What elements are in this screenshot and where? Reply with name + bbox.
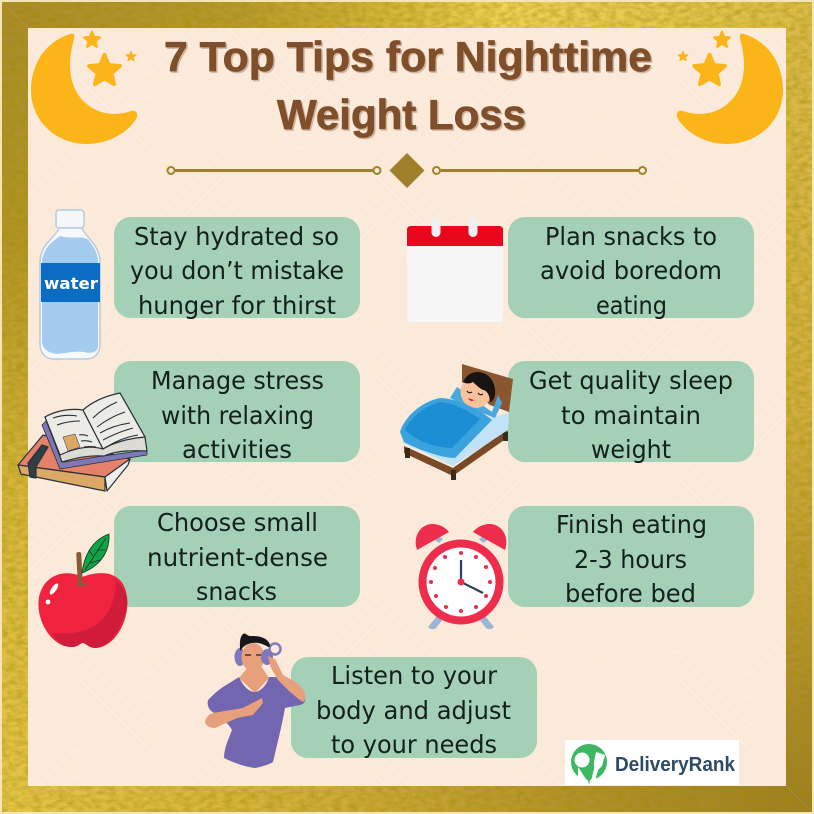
icon: water bottle: [40, 210, 100, 359]
panel: listen to your body: [291, 657, 537, 759]
panel: listen to your body: body and adjust: [316, 696, 511, 725]
panel: manage stress: [114, 361, 360, 464]
logo: DeliveryRank: [565, 740, 739, 785]
panel: listen to your body: Listen to your: [331, 661, 498, 690]
title: Weight Loss: [277, 91, 526, 138]
panel: quality sleep: to maintain: [561, 401, 701, 430]
panel: quality sleep: [508, 361, 754, 464]
panel: quality sleep: weight: [591, 435, 671, 464]
panel: manage stress: activities: [182, 435, 292, 464]
panel: stay hydrated: [114, 217, 360, 320]
panel: plan snacks: eating: [596, 291, 667, 320]
panel: finish eating: 2-3 hours: [574, 545, 687, 574]
icon: stacked books: [18, 393, 147, 491]
panel: manage stress: with relaxing: [161, 401, 314, 430]
icon: crescent moon and stars left: [31, 32, 137, 144]
panel: plan snacks: avoid boredom: [540, 256, 722, 285]
title: 7 Top Tips for Nighttime: [166, 34, 654, 82]
panel: plan snacks: [508, 217, 754, 320]
panel: finish eating: Finish eating: [556, 510, 707, 539]
panel: plan snacks: Plan snacks to: [545, 222, 717, 251]
panel: listen to your body: to your needs: [331, 730, 497, 759]
panel: stay hydrated: Stay hydrated so: [134, 222, 339, 251]
icon: alarm clock: [416, 524, 506, 629]
title: Weight Loss: [278, 92, 528, 140]
water label: water: [44, 274, 98, 293]
panel: quality sleep: Get quality sleep: [529, 366, 733, 395]
icon: person sleeping in bed: [400, 364, 513, 480]
logo: DeliveryRank: DeliveryRank: [615, 754, 736, 776]
icon: person listening to body: [205, 634, 305, 768]
icon: crescent moon and stars right: [677, 32, 783, 144]
icon: red apple: [38, 534, 127, 648]
panel: finish eating: [508, 506, 754, 608]
title divider: [168, 153, 646, 188]
panel: manage stress: Manage stress: [151, 366, 324, 395]
title: [164, 33, 654, 140]
panel: small snacks: nutrient-dense: [147, 543, 328, 572]
panel: small snacks: snacks: [196, 577, 277, 606]
title: 7 Top Tips for Nighttime: [164, 33, 652, 80]
panel: small snacks: [114, 506, 360, 607]
panel: stay hydrated: you don’t mistake: [130, 256, 344, 285]
panel: small snacks: Choose small: [157, 508, 318, 537]
panel: stay hydrated: hunger for thirst: [138, 291, 336, 320]
icon: calendar: [407, 217, 503, 322]
panel: finish eating: before bed: [565, 579, 696, 608]
